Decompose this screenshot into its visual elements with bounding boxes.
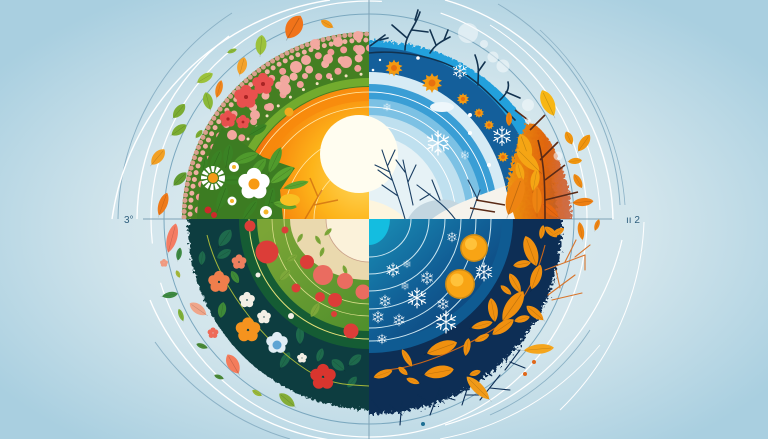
floating autumn leaves (upper) bbox=[506, 88, 594, 207]
quadrant: winter (top right) bbox=[369, 9, 578, 219]
orange leaves bbox=[370, 224, 566, 386]
sun bbox=[320, 115, 369, 193]
label: 3: 3° bbox=[124, 215, 134, 226]
spring leaves cluster bbox=[199, 121, 309, 224]
cloud bbox=[430, 102, 454, 112]
daisy large bbox=[238, 168, 270, 198]
winter sun icons bbox=[386, 60, 508, 162]
daisy spiky bbox=[204, 169, 222, 187]
winter outer disc bbox=[369, 38, 558, 219]
red berries bbox=[204, 206, 217, 218]
root branches bbox=[372, 350, 525, 425]
pink meadow flowers bbox=[227, 31, 365, 140]
navy disc bbox=[186, 34, 562, 414]
floating autumn leaves (lower) bbox=[421, 219, 601, 426]
pale snowflakes on sky bbox=[458, 23, 562, 160]
orbit lines bbox=[112, 0, 644, 439]
red blooms bbox=[244, 220, 358, 338]
yellow flower bbox=[280, 194, 300, 206]
small green sprigs bbox=[277, 227, 349, 320]
small daisies bbox=[228, 162, 272, 218]
blue dome outer bbox=[225, 85, 513, 353]
red flowers bbox=[220, 73, 274, 128]
white snow dots bbox=[372, 56, 491, 167]
branches bbox=[369, 10, 520, 120]
cyan centre bbox=[348, 193, 390, 245]
axis lines bbox=[143, 0, 612, 439]
blue dome inner bbox=[236, 97, 502, 341]
spring foliage base bbox=[197, 128, 295, 219]
autumn tree trunk bbox=[470, 110, 578, 219]
quadrant: spring (top left) bbox=[182, 31, 369, 219]
spring meadow disc bbox=[182, 32, 369, 219]
quadrant: autumn sea (bottom right) bbox=[186, 34, 590, 425]
floating summer leaves bbox=[160, 222, 299, 411]
dark green ring bbox=[239, 89, 499, 349]
winter dark band bbox=[369, 47, 520, 192]
snow hill grey bbox=[408, 200, 458, 219]
winter blue ring bbox=[369, 84, 495, 195]
sun overlap bbox=[369, 116, 398, 192]
quadrant: summer meadow (bottom left) bbox=[186, 219, 369, 412]
inner bare trees bbox=[375, 150, 480, 219]
navy disc bbox=[186, 219, 369, 412]
beige ring bbox=[290, 158, 448, 280]
spring orange rings bbox=[255, 87, 369, 219]
dark leaves bbox=[198, 227, 364, 391]
sunlit ground bbox=[369, 200, 405, 219]
copper branches bbox=[545, 240, 590, 300]
orange vine bbox=[385, 245, 545, 370]
floating spring leaves bbox=[146, 12, 336, 219]
vine bbox=[207, 235, 369, 386]
meadow ring bbox=[257, 107, 481, 331]
suns bbox=[445, 234, 488, 299]
label: 2: ıı 2 bbox=[626, 215, 640, 226]
yellow bud bbox=[284, 108, 294, 116]
snowflakes bbox=[384, 64, 510, 160]
snow hill white bbox=[432, 186, 515, 219]
autumn-toned twig bbox=[305, 178, 338, 219]
autumn transition blob bbox=[503, 122, 572, 224]
autumn tree leaves bbox=[506, 134, 560, 219]
sea snowflakes bbox=[373, 232, 492, 344]
spring green band bbox=[248, 78, 369, 152]
flowers on dark bbox=[208, 254, 336, 389]
winter pale ring bbox=[369, 72, 507, 192]
flower rim bbox=[182, 32, 369, 219]
